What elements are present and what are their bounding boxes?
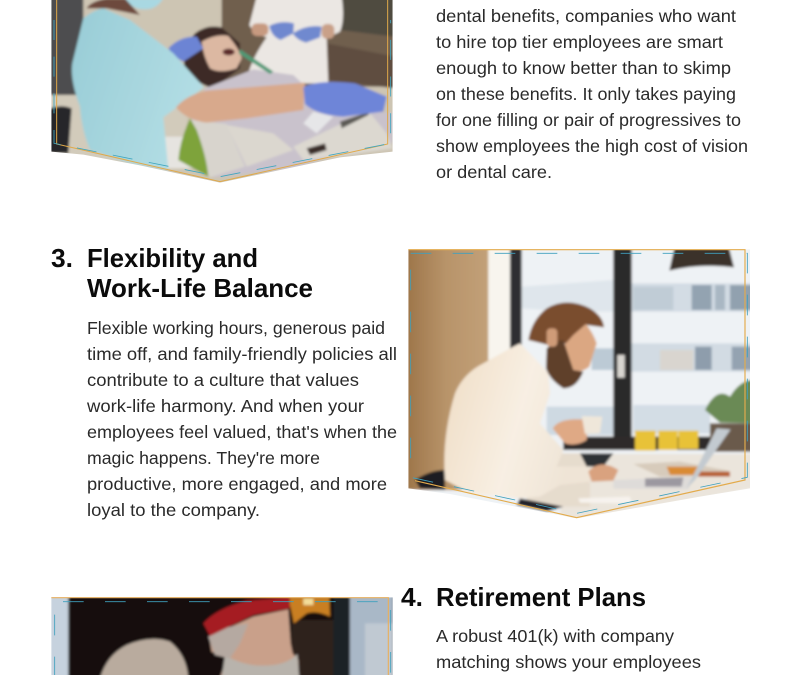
text: dental benefits paragraph: or dental care. <box>436 162 552 182</box>
text: retirement plans paragraph: matching shows your employees <box>436 652 701 672</box>
text: flexibility paragraph: Flexible working hours, generous paid <box>87 318 385 338</box>
photo: smiling man at laptop with coffee <box>405 245 755 525</box>
text: dental benefits paragraph: for one filling or pair of progressives to <box>436 110 741 130</box>
buildings through window <box>522 280 753 435</box>
heading: 3. Flexibility and Work-Life Balance: Work-Life Balance <box>87 273 313 303</box>
heading: 4. Retirement Plans: Retirement Plans <box>436 582 646 612</box>
plant <box>705 380 753 452</box>
text: dental benefits paragraph <box>436 6 748 182</box>
text: dental benefits paragraph: dental benefits, companies who want <box>436 6 736 26</box>
text: flexibility paragraph: contribute to a culture that values <box>87 370 359 390</box>
text: dental benefits paragraph: to hire top tier employees are smart <box>436 32 723 52</box>
text: flexibility paragraph <box>86 318 397 520</box>
heading: 3. Flexibility and Work-Life Balance: 3. <box>51 243 73 273</box>
frame: gold and teal outline <box>408 250 747 518</box>
white-coated nurse <box>247 0 343 83</box>
text: flexibility paragraph: employees feel valued, that's when the <box>87 422 397 442</box>
text: flexibility paragraph: work-life harmony. And when your <box>86 396 364 416</box>
heading: 3. Flexibility and Work-Life Balance <box>51 243 313 303</box>
dental tray <box>293 112 393 160</box>
man's face and beard <box>203 597 299 675</box>
photo: older couple, man in red hat <box>50 596 397 675</box>
yellow blocks <box>635 431 698 451</box>
text: flexibility paragraph: productive, more engaged, and more <box>87 474 387 494</box>
woman's hair <box>100 639 188 675</box>
text: retirement plans paragraph: A robust 401(k) with company <box>436 626 674 646</box>
text: dental benefits paragraph: show employees the high cost of vision <box>436 136 748 156</box>
frame: gold and teal outline <box>51 598 391 675</box>
man <box>415 302 618 512</box>
patient <box>178 26 393 177</box>
heading: 4. Retirement Plans: 4. <box>401 582 423 612</box>
text: dental benefits paragraph: on these benefits. It only takes paying <box>436 84 736 104</box>
text: flexibility paragraph: time off, and family-friendly policies all <box>87 344 397 364</box>
laptop <box>613 428 731 489</box>
text: retirement plans paragraph <box>436 626 701 672</box>
frame: gold and teal outline <box>54 0 391 182</box>
text: flexibility paragraph: magic happens. They're more <box>87 448 320 468</box>
text: flexibility paragraph: loyal to the company. <box>87 500 260 520</box>
photo: dental patient being treated <box>47 0 397 187</box>
text: dental benefits paragraph: enough to know better than to skimp <box>436 58 731 78</box>
heading: 3. Flexibility and Work-Life Balance: Flexibility and <box>87 243 258 273</box>
teal nurse <box>72 0 387 170</box>
